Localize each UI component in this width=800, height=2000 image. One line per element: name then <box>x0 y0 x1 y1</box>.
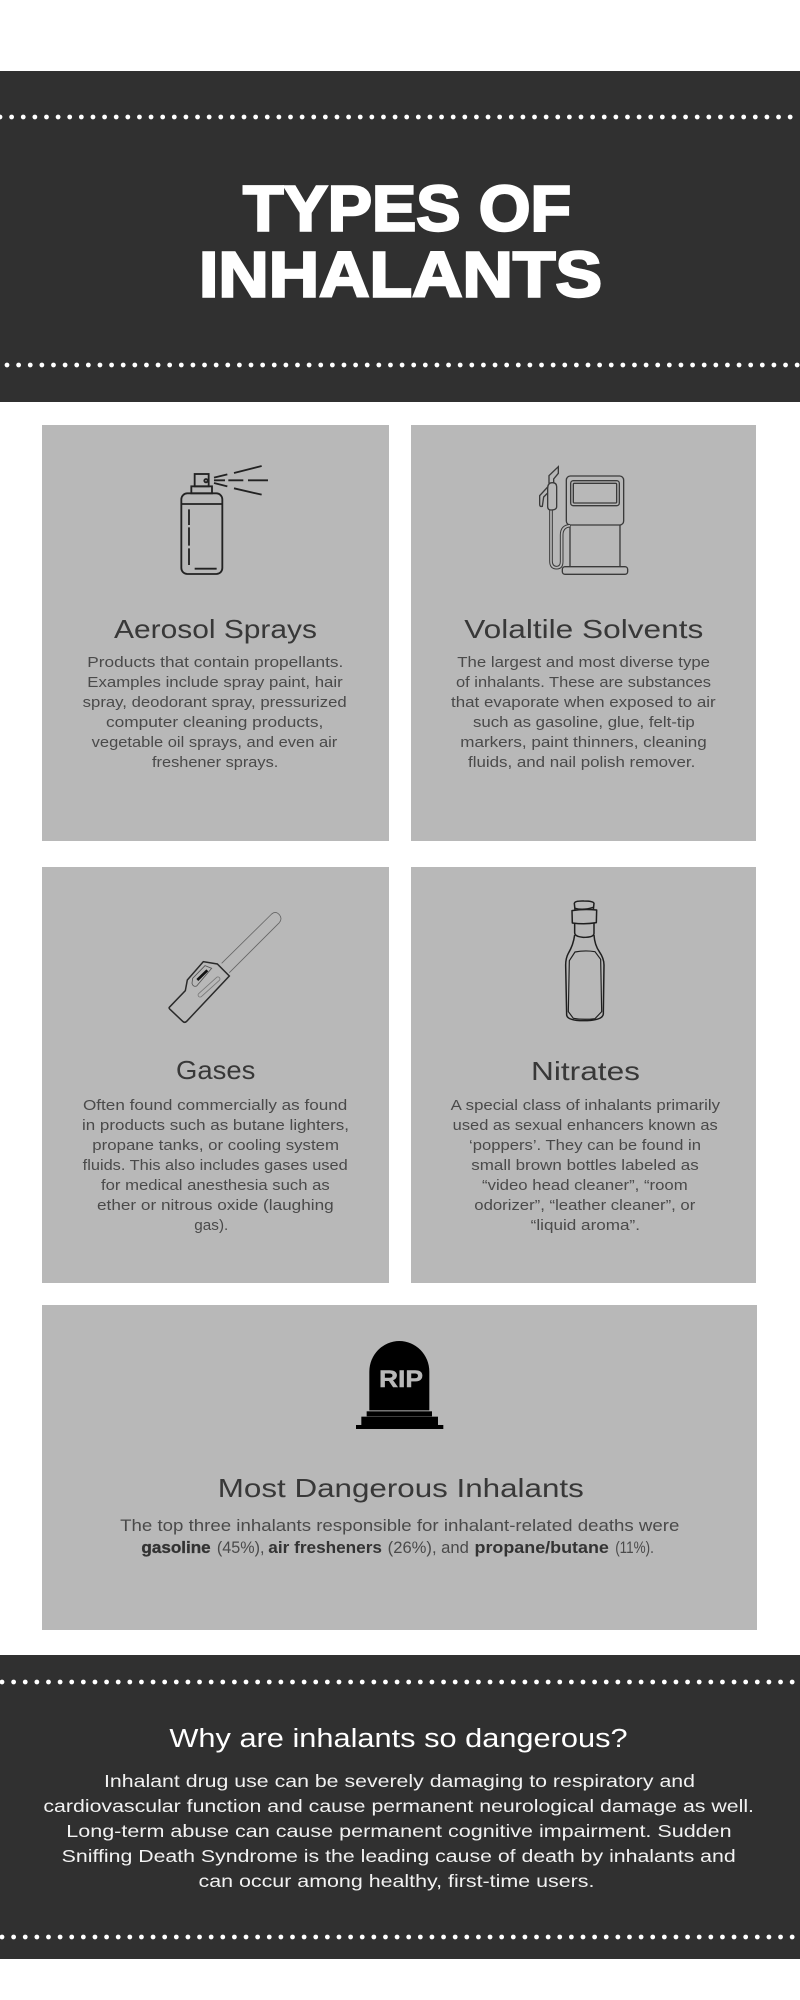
text: solvents description: fluids, and nail polish remover. <box>468 754 695 771</box>
text: nitrates description: used as sexual enhancers known as <box>453 1117 718 1134</box>
text: nitrates description: odorizer”, “leather cleaner”, or <box>474 1197 695 1214</box>
footer band: why are inhalants so dangerous <box>0 1655 800 1959</box>
panel: nitrates <box>411 867 756 1283</box>
heading: aerosol sprays: Aerosol Sprays <box>114 614 317 644</box>
icon: tombstone: RIP <box>379 1366 423 1393</box>
text: gases description: propane tanks, or cooling system <box>92 1137 339 1154</box>
panel: most dangerous inhalants <box>42 1305 757 1630</box>
text: why dangerous explanation: can occur among healthy, first-time users. <box>198 1871 594 1891</box>
text: aerosol description: freshener sprays. <box>152 754 278 771</box>
panel: volatile solvents <box>411 425 756 841</box>
text: gases description: ether or nitrous oxide (laughing <box>97 1197 334 1214</box>
text: aerosol description: computer cleaning products, <box>106 714 323 731</box>
text: nitrates description: A special class of inhalants primarily <box>451 1097 721 1114</box>
text: why dangerous explanation <box>43 1771 754 1891</box>
panel: aerosol sprays <box>42 425 389 841</box>
text: deaths statistics: (26%), and <box>388 1539 469 1557</box>
text: deaths statistics: air fresheners <box>268 1539 382 1557</box>
text: aerosol description: spray, deodorant spray, pressurized <box>83 694 347 711</box>
text: nitrates description: “video head cleaner”, “room <box>482 1177 688 1194</box>
text: deaths statistics: (45%), <box>217 1539 264 1557</box>
text: deaths statistics: gasoline <box>141 1539 211 1557</box>
icon: bottle <box>566 901 604 1021</box>
text: solvents description: of inhalants. These are substances <box>456 674 711 691</box>
text: nitrates description: “liquid aroma”. <box>531 1217 640 1234</box>
text: aerosol description: vegetable oil sprays, and even air <box>92 734 337 751</box>
text: solvents description <box>451 654 716 771</box>
text: gases description: gas). <box>194 1217 228 1234</box>
text: gases description: fluids. This also includes gases used <box>83 1157 348 1174</box>
text: deaths statistics: (11%). <box>615 1539 654 1557</box>
text: solvents description: The largest and most diverse type <box>457 654 710 671</box>
text: aerosol description: Products that contain propellants. <box>87 654 343 671</box>
text: deaths statistics: propane/butane <box>474 1539 609 1557</box>
heading: volatile solvents: Volaltile Solvents <box>464 614 703 644</box>
text: nitrates description: ‘poppers’. They can be found in <box>469 1137 701 1154</box>
text: solvents description: that evaporate when exposed to air <box>451 694 716 711</box>
text: nitrates description: small brown bottles labeled as <box>471 1157 699 1174</box>
title: INHALANTS <box>199 238 602 310</box>
heading: why dangerous: Why are inhalants so dangerous? <box>169 1725 628 1753</box>
heading: nitrates: Nitrates <box>531 1056 640 1086</box>
text: gases description <box>82 1097 349 1234</box>
text: why dangerous explanation: Sniffing Death Syndrome is the leading cause of death by inhalants and <box>62 1846 736 1866</box>
heading: gases: Gases <box>176 1055 255 1085</box>
text: nitrates description <box>451 1097 721 1234</box>
icon: gas pump <box>540 467 628 574</box>
text: aerosol description: Examples include spray paint, hair <box>87 674 343 691</box>
text: deaths statistics: The top three inhalants responsible for inhalant-related deaths were <box>120 1517 679 1535</box>
text: solvents description: markers, paint thinners, cleaning <box>460 734 707 751</box>
panel: gases <box>42 867 389 1283</box>
icon: butane lighter <box>169 912 281 1022</box>
text: aerosol description <box>83 654 347 771</box>
text: why dangerous explanation: cardiovascular function and cause permanent neurological damage as well. <box>43 1796 754 1816</box>
title: TYPES OF <box>243 172 571 244</box>
text: gases description: in products such as butane lighters, <box>82 1117 349 1134</box>
text: why dangerous explanation: Long-term abuse can cause permanent cognitive impairment. Sudden <box>66 1821 732 1841</box>
heading: most dangerous inhalants: Most Dangerous Inhalants <box>218 1473 584 1503</box>
icon: spray can <box>181 466 268 574</box>
text: gases description: for medical anesthesia such as <box>101 1177 330 1194</box>
icon: tombstone <box>356 1341 443 1429</box>
text: why dangerous explanation: Inhalant drug use can be severely damaging to respiratory and <box>104 1771 695 1791</box>
header band <box>0 71 800 402</box>
text: deaths statistics <box>120 1517 679 1557</box>
text: gases description: Often found commercially as found <box>83 1097 347 1114</box>
text: solvents description: such as gasoline, glue, felt-tip <box>473 714 695 731</box>
title <box>199 172 602 310</box>
